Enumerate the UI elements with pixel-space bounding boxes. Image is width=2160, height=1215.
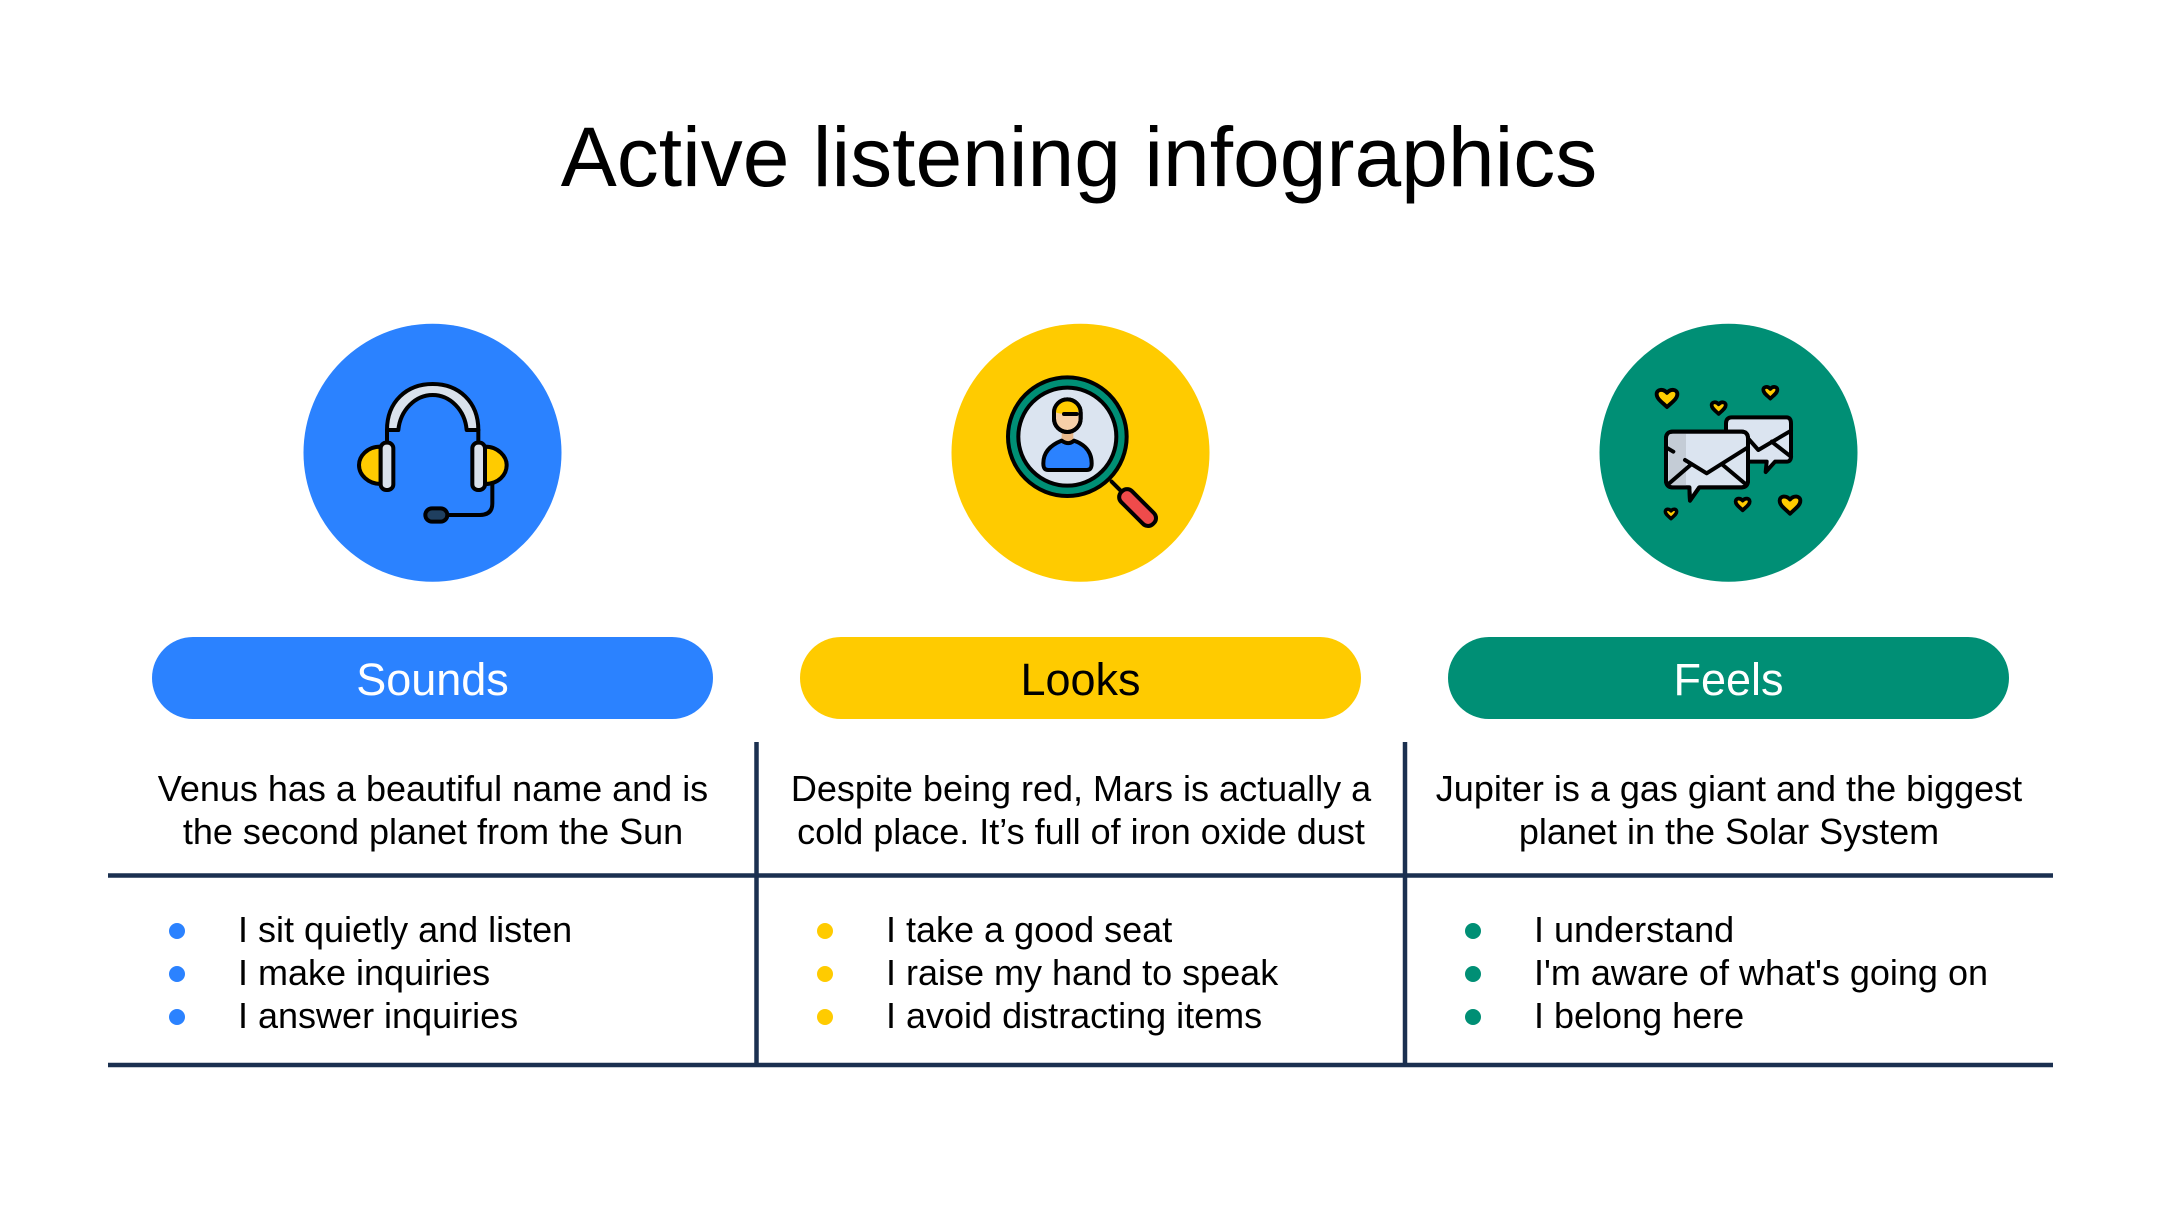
list: feels bullets: I'm aware of what's going on xyxy=(1534,952,1988,993)
text: feels description xyxy=(1436,768,2022,852)
title: Active listening infographics xyxy=(561,110,1597,204)
text: sounds description xyxy=(158,768,708,852)
list: looks bullets: I raise my hand to speak xyxy=(886,952,1279,993)
icon: magnifier with person in yellow circle xyxy=(952,324,1210,582)
list: feels bullets: I belong here xyxy=(1534,995,1744,1036)
list: sounds bullets: I answer inquiries xyxy=(238,995,518,1036)
pill: Sounds xyxy=(152,637,713,719)
panel: looks xyxy=(791,324,1372,1036)
text: looks description: cold place. It’s full of iron oxide dust xyxy=(797,811,1365,852)
list: sounds bullets: I make inquiries xyxy=(238,952,490,993)
list: sounds bullets: I sit quietly and listen xyxy=(238,909,572,950)
pill: Looks xyxy=(800,637,1361,719)
panel: sounds xyxy=(152,324,713,1036)
pill: Feels xyxy=(1448,637,2009,719)
list: looks bullets: I take a good seat xyxy=(886,909,1172,950)
table grid lines xyxy=(108,742,2053,1067)
list: looks bullets: I avoid distracting items xyxy=(886,995,1262,1036)
icon: envelopes and hearts in green circle xyxy=(1600,324,1858,582)
list: sounds bullets xyxy=(169,909,572,1036)
icon: headset in blue circle xyxy=(304,324,562,582)
pill: Sounds: Sounds xyxy=(356,654,509,705)
text: feels description: planet in the Solar System xyxy=(1519,811,1939,852)
pill: Looks: Looks xyxy=(1020,654,1141,705)
text: sounds description: Venus has a beautiful name and is xyxy=(158,768,708,809)
list: looks bullets xyxy=(817,909,1279,1036)
text: sounds description: the second planet from the Sun xyxy=(183,811,683,852)
list: feels bullets xyxy=(1465,909,1988,1036)
pill: Feels: Feels xyxy=(1673,654,1784,705)
text: looks description xyxy=(791,768,1372,852)
text: looks description: Despite being red, Mars is actually a xyxy=(791,768,1372,809)
panel: feels xyxy=(1436,324,2022,1036)
list: feels bullets: I understand xyxy=(1534,909,1734,950)
text: feels description: Jupiter is a gas giant and the biggest xyxy=(1436,768,2022,809)
